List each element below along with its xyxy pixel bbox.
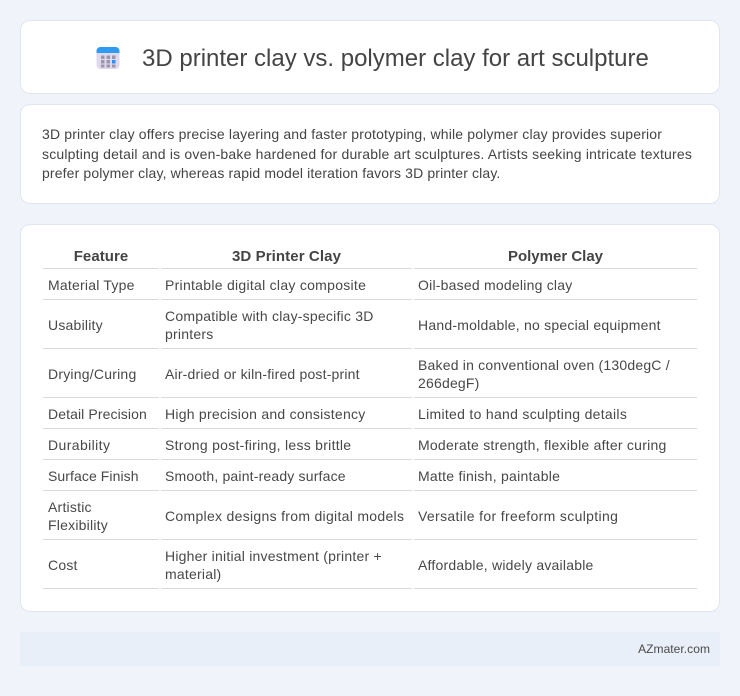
row: Surface Finish: Surface Finish <box>48 468 139 484</box>
row: Cost: Higher initial investment (printer + <box>165 548 382 564</box>
row: Drying/Curing: Air-dried or kiln-fired post-print <box>165 366 360 382</box>
row: Detail Precision: Detail Precision <box>48 406 147 422</box>
title: 3D printer clay vs. polymer clay for art sculpture <box>142 45 649 72</box>
row: Durability: Moderate strength, flexible after curing <box>418 437 667 453</box>
row: Artistic Flexibility: Complex designs from digital models <box>165 508 404 524</box>
row: Drying/Curing: 266degF) <box>418 375 480 391</box>
row: Drying/Curing: Drying/Curing <box>48 366 136 382</box>
row: Surface Finish <box>48 468 560 484</box>
row: Usability <box>48 308 661 342</box>
row: Artistic Flexibility: Flexibility <box>48 517 108 533</box>
footer brand text: AZmater.com <box>638 642 710 656</box>
table header row: 3D Printer Clay <box>232 248 341 265</box>
table header row <box>74 248 603 265</box>
row: Surface Finish: Matte finish, paintable <box>418 468 560 484</box>
row: Drying/Curing: Baked in conventional oven (130degC / <box>418 357 670 373</box>
row: Material Type: Printable digital clay composite <box>165 277 366 293</box>
row: Cost <box>48 548 594 582</box>
footer bar <box>20 632 720 666</box>
row: Usability: Compatible with clay-specific 3D <box>165 308 374 324</box>
panel: title card <box>20 20 720 94</box>
row: Artistic Flexibility: Versatile for freeform sculpting <box>418 508 618 524</box>
row: Durability <box>48 437 667 453</box>
summary paragraph: 3D printer clay offers precise layering and faster prototyping, while polymer clay provides superior <box>42 126 662 142</box>
row: Artistic Flexibility: Artistic <box>48 499 92 515</box>
summary paragraph: prefer polymer clay, whereas rapid model iteration favors 3D printer clay. <box>42 165 500 181</box>
row: Detail Precision <box>48 406 627 422</box>
row: Usability: Usability <box>48 317 103 333</box>
row: Detail Precision: Limited to hand sculpting details <box>418 406 627 422</box>
row: Cost: Affordable, widely available <box>418 557 594 573</box>
row: Material Type <box>48 277 572 293</box>
row: Cost: material) <box>165 566 221 582</box>
panel: summary text <box>20 104 720 204</box>
row: Drying/Curing <box>48 357 670 391</box>
icon: calendar grid <box>96 47 120 69</box>
row: Material Type: Oil-based modeling clay <box>418 277 572 293</box>
row: Cost: Cost <box>48 557 78 573</box>
row: Durability: Durability <box>48 437 110 453</box>
row: Usability: Hand-moldable, no special equipment <box>418 317 661 333</box>
summary paragraph: sculpting detail and is oven-bake hardened for durable art sculptures. Artists seeking intricate textures <box>42 146 692 162</box>
row: Artistic Flexibility <box>48 499 618 533</box>
row: Detail Precision: High precision and consistency <box>165 406 366 422</box>
row: Durability: Strong post-firing, less brittle <box>165 437 351 453</box>
table header row: Polymer Clay <box>508 248 603 265</box>
summary paragraph <box>42 126 692 181</box>
row: Material Type: Material Type <box>48 277 135 293</box>
row: Surface Finish: Smooth, paint-ready surface <box>165 468 346 484</box>
row: Usability: printers <box>165 326 213 342</box>
panel: comparison table <box>20 224 720 612</box>
table header row: Feature <box>74 248 128 265</box>
